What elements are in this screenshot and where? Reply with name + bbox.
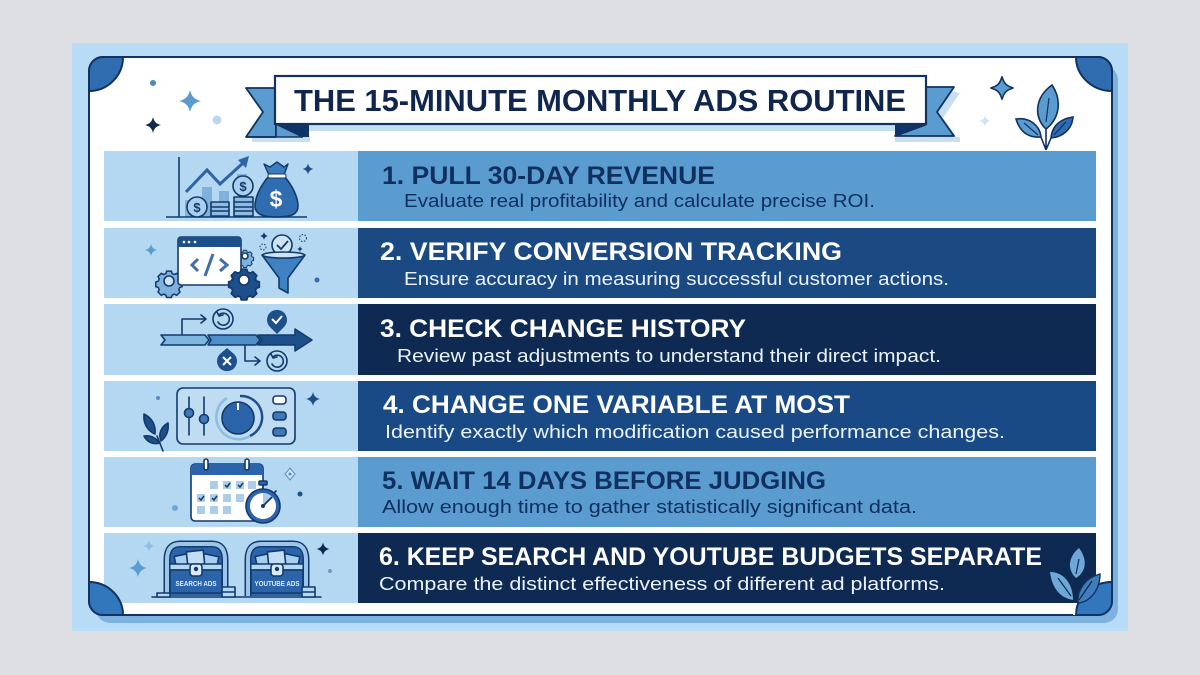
row 4: 4. CHANGE ONE VARIABLE AT MOST xyxy=(383,391,850,419)
icon: calendar and stopwatch xyxy=(172,459,302,523)
row 5: 5. WAIT 14 DAYS BEFORE JUDGING xyxy=(382,467,826,495)
row 1: 1. PULL 30-DAY REVENUE xyxy=(382,162,715,190)
white card xyxy=(89,57,1112,615)
title banner xyxy=(246,76,960,142)
chest: search ads xyxy=(157,544,235,597)
row 3: Review past adjustments to understand their direct impact. xyxy=(397,346,941,366)
icon: two treasure chests xyxy=(129,540,332,597)
row 3: 3. CHECK CHANGE HISTORY xyxy=(380,315,746,343)
light blue backdrop xyxy=(72,43,1128,631)
icon: code window, gears and funnel xyxy=(145,232,320,300)
row 6: Compare the distinct effectiveness of different ad platforms. xyxy=(379,574,945,594)
corner: top left xyxy=(89,57,123,91)
title banner: THE 15-MINUTE MONTHLY ADS ROUTINE xyxy=(294,83,906,118)
decoration: bottom right plant xyxy=(1050,548,1100,615)
decoration: top left sparkles xyxy=(145,80,222,133)
corner: top right xyxy=(1076,57,1112,91)
row 5: Allow enough time to gather statistically significant data. xyxy=(382,497,917,517)
icon: change timeline arrow xyxy=(161,309,312,371)
chest: youtube ads xyxy=(247,544,315,597)
row 3 xyxy=(104,304,1096,375)
icon: revenue chart and money bag: $ xyxy=(193,200,201,215)
corner: bottom left xyxy=(89,582,123,615)
icon: revenue chart and money bag: $ xyxy=(239,179,247,194)
row 6: 6. KEEP SEARCH AND YOUTUBE BUDGETS SEPARATE xyxy=(379,543,1042,571)
icon: control panel with dial xyxy=(144,388,320,451)
icon: revenue chart and money bag xyxy=(166,156,314,217)
chest: youtube ads: YOUTUBE ADS xyxy=(254,581,300,588)
row 4: Identify exactly which modification caused performance changes. xyxy=(385,422,1005,442)
row 2: 2. VERIFY CONVERSION TRACKING xyxy=(380,238,842,266)
row 1 xyxy=(104,151,1096,221)
row 2: Ensure accuracy in measuring successful customer actions. xyxy=(404,269,949,289)
row 2 xyxy=(104,228,1096,300)
chest: search ads: SEARCH ADS xyxy=(176,581,217,588)
corner: bottom right xyxy=(1076,582,1112,615)
row 4 xyxy=(104,381,1096,451)
icon: revenue chart and money bag: $ xyxy=(270,186,283,212)
row 6 xyxy=(104,533,1096,603)
decoration: top right star and plant xyxy=(980,76,1073,150)
row 5 xyxy=(104,457,1096,527)
row 1: Evaluate real profitability and calculate precise ROI. xyxy=(404,191,875,211)
card shadow xyxy=(96,66,1118,623)
